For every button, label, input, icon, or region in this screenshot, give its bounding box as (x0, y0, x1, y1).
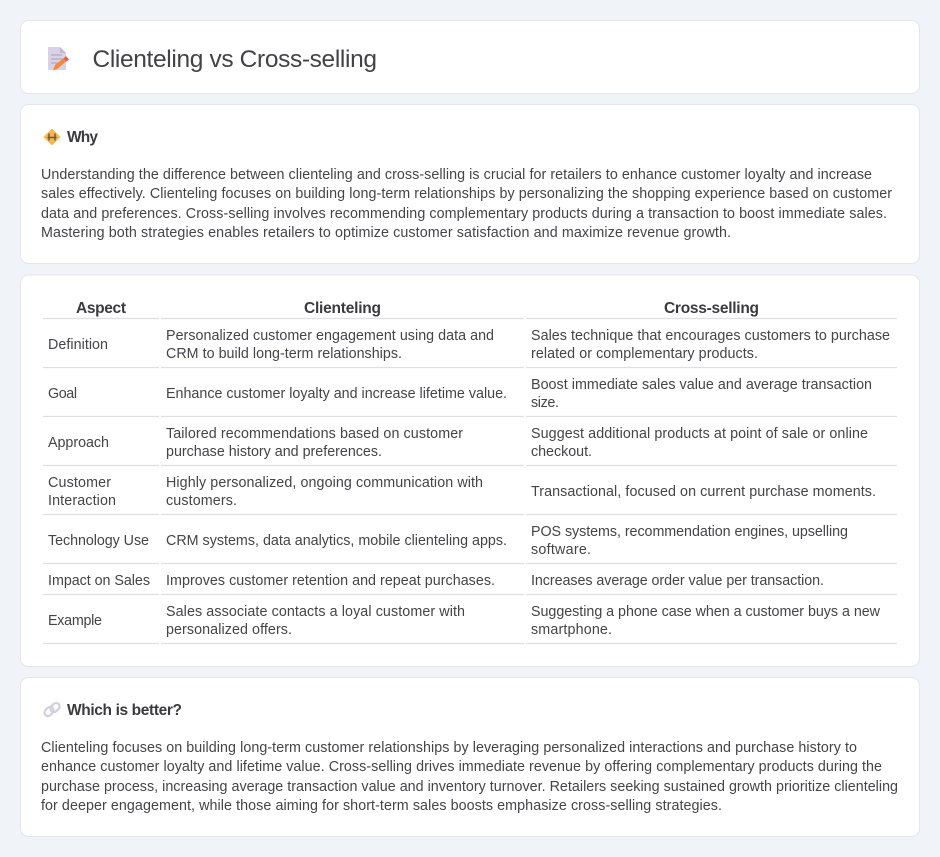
row: approach: Tailored recommendations based on customer (166, 426, 463, 442)
text block: why paragraph: sales effectively. Clienteling focuses on building long-term relationships by personalizing the shopping experience based on customer (41, 186, 892, 202)
heading: why: Why (67, 129, 98, 146)
row: technology use: CRM systems, data analytics, mobile clienteling apps. (166, 533, 507, 549)
row: example: personalized offers. (166, 622, 292, 638)
row: goal (43, 377, 897, 416)
row: customer interaction: customers. (166, 493, 237, 509)
row: impact on sales (43, 573, 897, 594)
table header row (43, 300, 897, 318)
row: customer interaction: Interaction (48, 493, 116, 509)
row: approach: Approach (48, 435, 109, 451)
row: technology use: POS systems, recommendation engines, upselling (531, 524, 848, 540)
title: Clienteling vs Cross-selling (92, 46, 377, 73)
row: example: smartphone. (531, 622, 612, 638)
text block: why paragraph: Understanding the difference between clienteling and cross-selling is crucial for retailers to enhance customer loyalty and increase (41, 167, 872, 183)
panel: why (20, 104, 920, 264)
panel: comparison table (20, 275, 920, 666)
text block: why paragraph (41, 167, 892, 241)
text block: why paragraph: Mastering both strategies enables retailers to optimize customer satisfaction and maximize revenue growth. (41, 225, 731, 241)
row: impact on sales: Increases average order value per transaction. (531, 573, 824, 589)
row: technology use: Technology Use (48, 533, 149, 549)
row: definition (43, 328, 897, 368)
row: example: Suggesting a phone case when a customer buys a new (531, 604, 881, 620)
table header row: Clienteling (304, 300, 381, 317)
row: goal: size. (531, 395, 559, 411)
row: definition: Sales technique that encourages customers to purchase (531, 328, 890, 344)
icon: chain link (43, 701, 61, 718)
row: approach (43, 426, 897, 466)
text block: why paragraph: data and preferences. Cross-selling involves recommending complementary products during a transaction to boost immediate sales. (41, 206, 887, 222)
row: customer interaction: Transactional, focused on current purchase moments. (531, 484, 876, 500)
row: example: Sales associate contacts a loyal customer with (166, 604, 465, 620)
text block: which is better paragraph: purchase process, increasing average transaction value and inventory turnover. Retailers seeking sustained growth prioritize clienteling (41, 779, 898, 795)
text block: which is better paragraph: enhance customer loyalty and lifetime value. Cross-selling drives immediate revenue by offering complementary products during the (41, 759, 882, 775)
row: customer interaction: Customer (48, 475, 111, 491)
row: goal: Enhance customer loyalty and increase lifetime value. (166, 386, 507, 402)
icon: warning diamond (44, 128, 60, 146)
icon: document with pencil (48, 47, 69, 70)
table header row: Cross-selling (664, 300, 759, 317)
row: definition: Definition (48, 337, 108, 353)
panel: title header (20, 20, 920, 94)
row: example: Example (48, 613, 102, 629)
heading: which is better: Which is better? (67, 702, 182, 719)
row: definition: Personalized customer engagement using data and (166, 328, 494, 344)
row: approach: checkout. (531, 444, 592, 460)
row: definition: related or complementary products. (531, 346, 758, 362)
row: technology use: software. (531, 542, 591, 558)
row: customer interaction (43, 475, 897, 514)
row: approach: Suggest additional products at point of sale or online (531, 426, 868, 442)
row: impact on sales: Impact on Sales (48, 573, 150, 589)
panel: which is better (20, 678, 920, 836)
row: technology use (43, 524, 897, 564)
text block: which is better paragraph: for deeper engagement, while those aiming for short-term sales boosts emphasize cross-selling strategies. (41, 798, 722, 814)
row: approach: purchase history and preferences. (166, 444, 382, 460)
table header row: Aspect (76, 300, 126, 317)
row: impact on sales: Improves customer retention and repeat purchases. (166, 573, 495, 589)
row: customer interaction: Highly personalized, ongoing communication with (166, 475, 483, 491)
row: definition: CRM to build long-term relationships. (166, 346, 402, 362)
text block: which is better paragraph (41, 740, 898, 814)
row: goal: Goal (48, 386, 77, 402)
row: example (43, 604, 897, 644)
row: goal: Boost immediate sales value and average transaction (531, 377, 872, 393)
text block: which is better paragraph: Clienteling focuses on building long-term customer relationships by leveraging personalized interactions and purchase history to (41, 740, 857, 756)
